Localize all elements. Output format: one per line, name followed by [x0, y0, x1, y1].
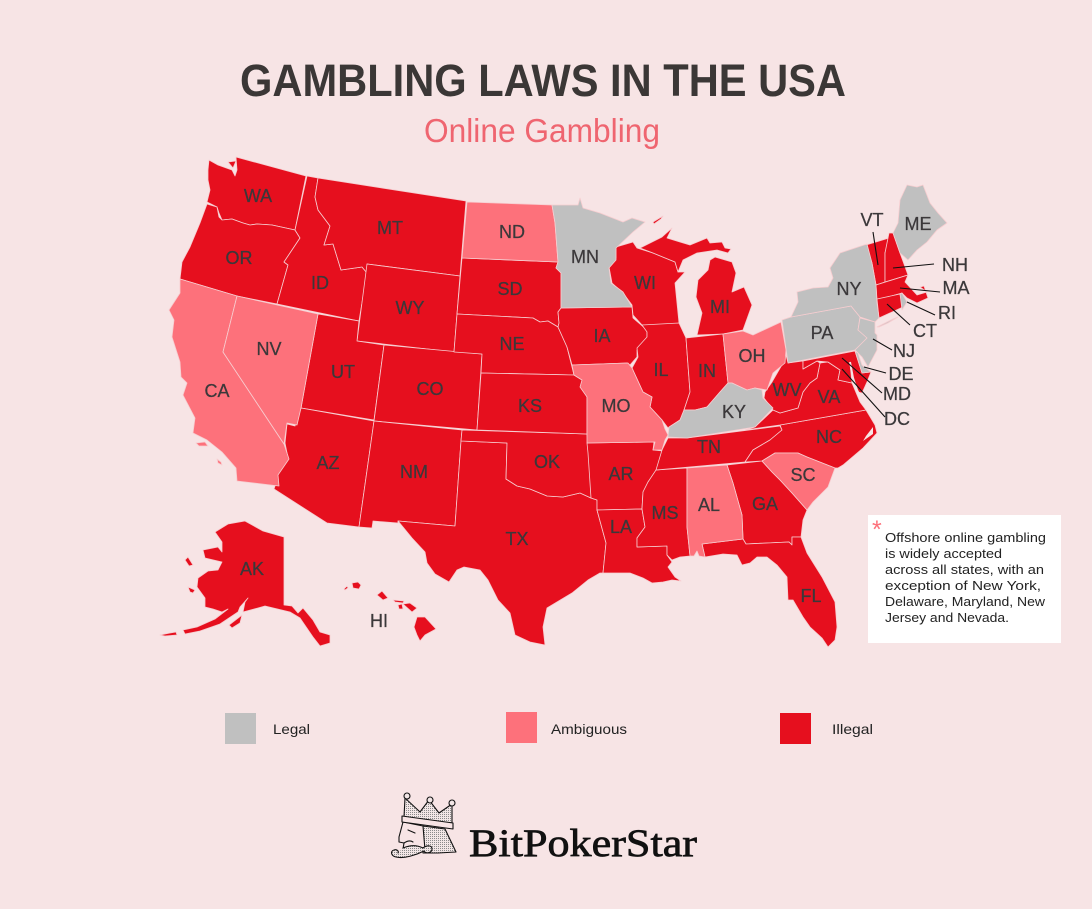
island: Channel Islands [196, 442, 208, 446]
state: WV [764, 347, 820, 413]
state labels: LA [610, 517, 632, 537]
state labels: NV [256, 339, 282, 359]
state labels: MA [942, 278, 970, 298]
legend: illegal [780, 713, 873, 744]
state: NY [791, 244, 879, 322]
island: HI Molokai [393, 600, 404, 603]
state: ID [277, 176, 367, 321]
state labels: SC [790, 465, 816, 485]
state labels: NM [400, 462, 428, 482]
state: NC [745, 410, 877, 468]
leader lines for northeastern states [842, 232, 940, 417]
callout text: is widely accepted [885, 546, 1002, 561]
state: MN [552, 198, 645, 308]
state labels: IL [653, 360, 669, 380]
state: CT [877, 294, 903, 318]
state labels: WA [244, 186, 272, 206]
island: San Juan [228, 161, 236, 168]
island: Nunivak [188, 587, 195, 593]
state labels: WV [772, 380, 802, 400]
title: GAMBLING LAWS IN THE USA [240, 55, 846, 106]
state labels [204, 186, 970, 631]
state: UT [301, 314, 384, 420]
state labels: IA [593, 326, 611, 346]
state labels: CO [416, 379, 444, 399]
state: MI lower peninsula [696, 257, 752, 335]
legend [225, 712, 873, 744]
callout: offshore note [868, 515, 1061, 643]
state: MT [315, 178, 466, 276]
state: TN [656, 426, 782, 470]
state: AK [183, 521, 330, 646]
state labels: AZ [316, 453, 340, 473]
state: RI [900, 293, 907, 310]
island: HI Oahu [377, 591, 388, 600]
state: VT [866, 238, 889, 285]
state: KS [477, 373, 587, 434]
state labels: OR [226, 248, 253, 268]
state labels: GA [752, 494, 778, 514]
state labels: MD [883, 384, 911, 404]
state: OK [461, 430, 591, 498]
legend: ambiguous: Ambiguous [551, 721, 627, 737]
state labels: NY [836, 279, 862, 299]
illegal states [160, 157, 928, 647]
state: MS [637, 468, 690, 560]
state labels: DE [888, 364, 914, 384]
state: KY [668, 383, 773, 438]
state labels: MO [602, 396, 630, 416]
legend: legal: Legal [273, 721, 310, 737]
state: MD [803, 351, 871, 393]
state labels: MN [571, 247, 599, 267]
state labels: UT [331, 362, 355, 382]
state labels: KS [518, 396, 542, 416]
state labels: AR [608, 464, 634, 484]
state: AL [687, 465, 743, 557]
legend: illegal: Illegal [832, 721, 873, 737]
state labels: SD [497, 279, 523, 299]
state labels: VA [818, 387, 840, 407]
island: Aleutian [160, 632, 177, 636]
state: GA [727, 461, 807, 545]
logo: BitPokerStar [392, 793, 697, 865]
callout text: Offshore online gambling [885, 530, 1046, 545]
state: CA [169, 279, 289, 486]
legal states [552, 185, 947, 438]
subtitle: Online Gambling [424, 112, 660, 149]
state: OH [723, 322, 786, 390]
Chesapeake Bay [850, 362, 861, 398]
island: HI Niihau [344, 586, 348, 590]
island: HI Maui [403, 603, 417, 612]
state labels: ND [499, 222, 525, 242]
state labels: CT [913, 321, 937, 341]
state: OR [180, 204, 300, 304]
state: WI [609, 242, 685, 325]
legend: legal [225, 713, 310, 744]
state labels: AK [240, 559, 264, 579]
state: WA [207, 157, 306, 230]
state: NM [359, 421, 462, 528]
state: WY [357, 264, 460, 352]
state: FL [702, 537, 837, 647]
Pamlico Sound [863, 427, 873, 441]
legend: ambiguous [506, 712, 627, 743]
state: TX [398, 441, 606, 645]
state labels: TN [697, 437, 721, 457]
state: NH [885, 233, 908, 282]
state labels: ME [904, 214, 932, 234]
island: Long Island [877, 317, 898, 327]
state labels: IN [698, 361, 716, 381]
state: MI upper peninsula [640, 228, 731, 272]
state: DE [855, 351, 871, 373]
island: HI Kauai [352, 582, 361, 589]
ambiguous states [169, 202, 835, 557]
island: Isle Royale [653, 216, 663, 224]
state: NE [454, 314, 574, 375]
state: LA [597, 509, 681, 583]
state: IN [684, 334, 728, 410]
wordmark: BitPokerStar [469, 822, 697, 865]
state labels: NJ [893, 341, 915, 361]
island: Santa Catalina [217, 459, 222, 465]
state labels: MI [710, 297, 730, 317]
state labels: MS [652, 503, 678, 523]
state: CO [374, 345, 482, 430]
state labels: WY [396, 298, 424, 318]
island: HI Big Island [414, 617, 436, 641]
callout text: Delaware, Maryland, New [885, 594, 1046, 609]
state: SC [762, 453, 835, 510]
state: IL [632, 323, 690, 428]
callout text: exception of New York, [885, 578, 1041, 593]
state labels: MT [377, 218, 403, 238]
state: PA [782, 306, 868, 363]
callout text: across all states, with an [885, 562, 1044, 577]
state labels: TX [505, 529, 529, 549]
callout asterisk: * [872, 516, 882, 544]
state: MA [876, 275, 928, 303]
state labels: DC [884, 409, 910, 429]
state labels: WI [634, 273, 656, 293]
icon: king head [392, 793, 456, 858]
state labels: OH [738, 346, 766, 366]
state labels: HI [370, 611, 388, 631]
state labels: FL [800, 586, 822, 606]
callout text: Jersey and Nevada. [885, 610, 1009, 625]
state: NJ [855, 318, 877, 367]
state labels: NH [942, 255, 968, 275]
state: IA [558, 307, 647, 365]
state: ME [893, 185, 947, 260]
state labels: OK [534, 452, 560, 472]
state labels: KY [722, 402, 746, 422]
island: St Lawrence [185, 557, 193, 566]
callout text [885, 530, 1046, 625]
state: VA [745, 362, 866, 430]
state: AR [587, 442, 663, 510]
state: NV [223, 296, 318, 444]
state: AZ [274, 408, 374, 527]
state labels: NC [816, 427, 842, 447]
state labels: AL [698, 495, 720, 515]
island: HI Lanai [398, 604, 403, 609]
state: SD [457, 258, 561, 327]
state labels: VT [860, 210, 884, 230]
state labels: RI [938, 303, 956, 323]
map of the USA [160, 157, 947, 647]
island: Kodiak [229, 615, 242, 628]
state: MO [572, 363, 668, 450]
state labels: NE [499, 334, 525, 354]
state labels: PA [811, 323, 833, 343]
state labels: ID [311, 273, 329, 293]
state labels: CA [204, 381, 230, 401]
state: ND [462, 202, 558, 262]
